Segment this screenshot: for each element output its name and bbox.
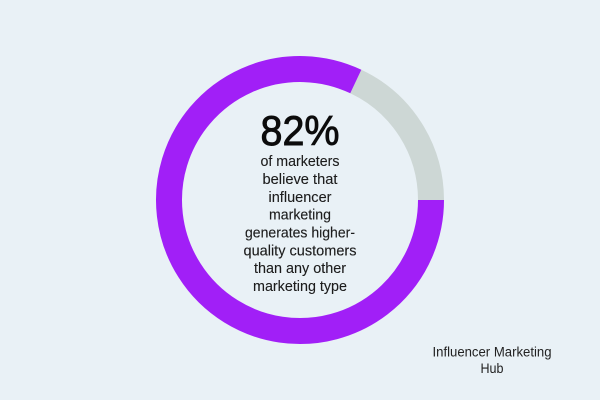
description text: influencer [268, 189, 332, 206]
source credit: Influencer Marketing [432, 344, 552, 360]
description text: marketing [269, 206, 331, 224]
source credit [432, 344, 552, 376]
description text: than any other [254, 260, 346, 277]
description text: generates higher- [245, 224, 355, 242]
description text: of marketers [260, 153, 340, 170]
description text: believe that [262, 171, 338, 188]
donut chart: 82% [169, 69, 431, 331]
description text: marketing type [253, 278, 347, 295]
description text [244, 153, 356, 295]
source credit: Hub [480, 361, 504, 376]
headline statistic: 82% [260, 107, 340, 154]
remaining 18% segment [356, 82, 431, 200]
description text: quality customers [244, 242, 356, 260]
82% segment [169, 69, 431, 331]
